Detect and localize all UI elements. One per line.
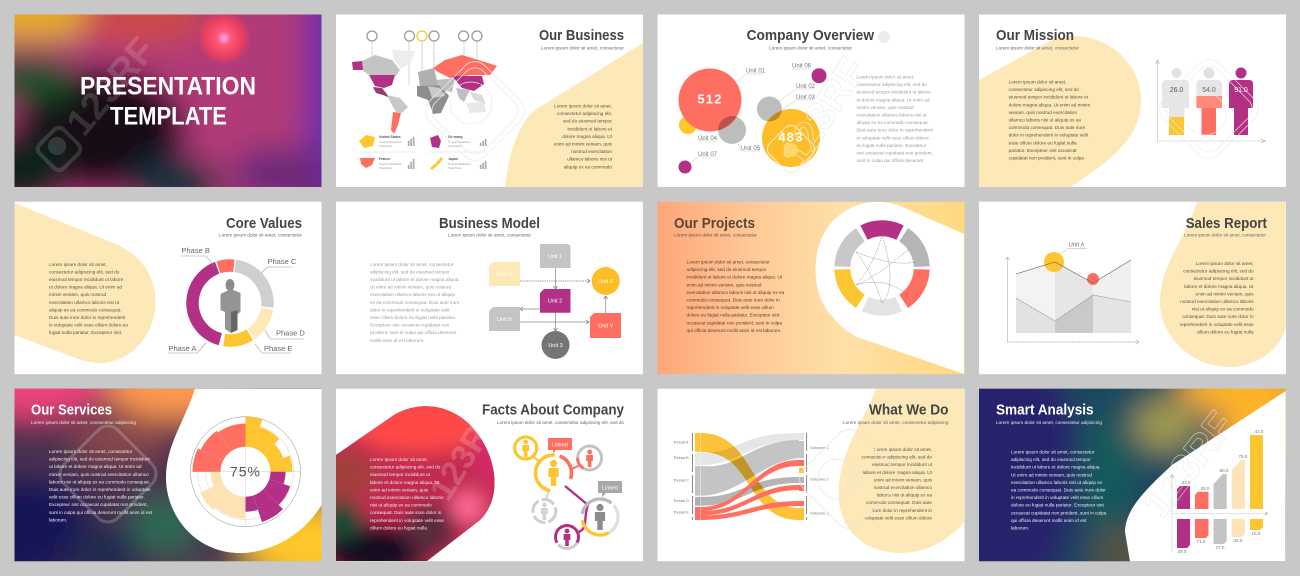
text block: Excepteur sint occaecat cupidatat non proident, [49, 502, 148, 507]
text block: proident, sunt in culpa qui officia deserunt [370, 330, 457, 335]
text block: eiusmod tempor incididunt ut labore [856, 90, 931, 95]
area chart: Unit A [1068, 242, 1085, 248]
text block: sed do eiusmod tempor [563, 119, 612, 124]
bubble chart: Unit 03 [796, 95, 816, 101]
map legend: Overall Statistics [379, 140, 402, 144]
subheading: Lorem ipsum dolor sit amet, consectetur adipiscing elit, sed do [497, 420, 625, 425]
panel: facts about company [336, 388, 643, 562]
text block: nisi ut aliquip ex ea commodo [1192, 307, 1254, 312]
bubble chart: Unit 01 [746, 68, 766, 74]
map legend: United States [379, 135, 401, 139]
map legend: Overall Statistics [448, 162, 471, 166]
text block: minim veniam, quis nostrud [49, 292, 106, 297]
bubble chart: 483 [778, 130, 804, 144]
map legend: Total Rate [379, 144, 393, 148]
text block: qui officia deserunt mollit anim id est [1011, 518, 1087, 523]
text block: laborum. [1011, 526, 1029, 530]
flow diagram: Unit 3 [548, 343, 563, 349]
text block: consectetur adipiscing elit, sed do [1183, 269, 1254, 274]
text block: labore et dolore magna aliqua. Ut [863, 470, 933, 475]
map legend: Total Rate [448, 166, 462, 170]
text block: enim ad minim veniam, quis [1195, 291, 1254, 296]
map legend: Total Rate [379, 166, 393, 170]
phase labels: Phase E [264, 344, 292, 353]
text block: Duis aute irure dolor in reprehenderit [856, 128, 934, 133]
text block: Lorem ipsum dolor sit amet, consectetur [686, 260, 770, 264]
panel: sales report [979, 202, 1286, 374]
text block: labore et dolore magna aliqua. Ut [1184, 284, 1254, 289]
text block: dolore eu fugiat nulla pariatur. Excepteur sint [686, 313, 780, 318]
text block: qui officia deserunt mollit anim id est laborum. [686, 328, 782, 333]
text block: exercitation ullamco laboris nisi ut [856, 112, 927, 118]
sankey chart: Outcome 1 [810, 446, 829, 450]
watermark stamp [794, 424, 904, 534]
map legend: Overall Statistics [379, 162, 402, 166]
text block: aliquip ex ea commodo consequat. [49, 307, 121, 312]
text block: consectetur adipiscing elit, sed do [856, 82, 927, 87]
text block: reprehenderit in voluptate velit esse cillum [686, 305, 774, 310]
text block: ut labore et dolore magna aliqua. Ut enim ad [49, 464, 142, 469]
text block: in reprehenderit in voluptate velit esse cillum [1011, 495, 1103, 500]
subheading: Lorem ipsum dolor sit amet, consectetur [1184, 233, 1267, 238]
text block: dolore magna aliqua. Ut [562, 134, 613, 139]
text block: ex ea commodo consequat. Duis aute irure [370, 300, 460, 305]
text block: minim veniam, quis nostrud [856, 105, 914, 110]
text block: Lorem ipsum dolor sit amet, [1009, 80, 1066, 84]
watermark stamp [420, 56, 530, 166]
panel: what we do [658, 389, 964, 561]
text block: nostrud exercitation ullamco laboris [370, 495, 444, 500]
text block: adipiscing elit, sed do eiusmod tempor incididunt [49, 457, 151, 462]
subheading: Lorem ipsum dolor sit amet, consectetur [996, 46, 1080, 51]
panel: title slide [14, 14, 322, 187]
text block: occaecat cupidatat non proident, sunt in culpa [1011, 510, 1107, 515]
heading: Our Business [539, 27, 624, 44]
text block: nostrud exercitation ullamco laboris [1180, 299, 1254, 304]
panel: our projects [658, 202, 964, 374]
text block: commodo consequat. Duis aute irure [1009, 125, 1086, 130]
bubble chart: 512 [697, 92, 723, 106]
text block: Lorem ipsum dolor sit amet, consectetur [49, 449, 133, 454]
text block: in voluptate velit esse cillum dolore eu [49, 323, 128, 328]
heading: presentation template [82, 76, 254, 124]
text block: nisi ut aliquip ex ea commodo [370, 503, 432, 508]
text block: consequat. Duis aute irure dolor in [1182, 314, 1254, 319]
text block: Ut enim ad minim veniam, quis nostrud [370, 285, 451, 290]
text block: et dolore magna aliqua. Ut enim ad [856, 97, 930, 102]
text block: consectetur adipiscing elit, [557, 111, 612, 116]
text block: ullamco laboris nisi ut aliquip ex ea [1009, 118, 1081, 122]
gradient pill [336, 406, 494, 561]
panel: our business [336, 14, 643, 187]
text block: laboris nisi ut aliquip ex ea commodo consequat. [49, 479, 150, 484]
radial chart [190, 417, 301, 527]
text block: irure dolor in reprehenderit in [872, 508, 932, 513]
text block: incididunt ut labore et [567, 126, 613, 131]
text block: commodo consequat. Duis aute [866, 500, 932, 505]
text block: cillum dolore eu fugiat nulla [1197, 329, 1254, 334]
subheading: Lorem ipsum dolor sit amet, consectetur [448, 233, 532, 238]
watermark: 123RF [1134, 404, 1243, 526]
text block: nostrud exercitation [571, 149, 612, 154]
text block: pariatur. Excepteur sint occaecat [1009, 148, 1077, 153]
people values: 91.0 [1234, 87, 1248, 94]
area chart [1006, 242, 1139, 344]
network diagram [515, 437, 625, 553]
text block: commodo consequat. Duis aute irure dolor in [686, 298, 780, 302]
text block: Lorem ipsum dolor sit amet, consectetur [370, 262, 454, 267]
heading: presentation template: TEMPLATE [110, 102, 227, 130]
people chart [1156, 60, 1266, 143]
text block: eiusmod tempor incididunt ut [1194, 276, 1254, 281]
map legend: Overall Statistics [448, 140, 471, 144]
panel: smart analysis [979, 388, 1286, 562]
diverging bar chart: 33.0 [1182, 480, 1191, 485]
heading: Our Mission [996, 27, 1074, 44]
callout: linked gray [598, 481, 622, 497]
radial chart: 75% [230, 464, 261, 480]
sankey chart: Thread A [673, 440, 689, 444]
text block: enim ad minim veniam, quis [874, 477, 933, 482]
bubble chart: Unit 06 [792, 64, 812, 70]
icon: person [220, 279, 240, 333]
diverging bar chart: 50.0 [1220, 468, 1229, 473]
diverging bar chart: 27.0 [1216, 545, 1225, 550]
text block: aliquip ex ea commodo consequat. [856, 120, 929, 125]
people values [1170, 87, 1248, 94]
text block: minim veniam, quis nostrud exercitation ullamco [49, 472, 149, 477]
map legend: Germany [448, 135, 463, 139]
text block: laboris nisi ut aliquip ex ea [877, 493, 932, 498]
text block: dolore magna aliqua. Ut enim ad minim [1009, 102, 1090, 107]
diverging bar chart [1170, 429, 1268, 554]
panel: company overview [658, 14, 964, 187]
text block: cillum dolore eu fugiat nulla. [370, 525, 428, 530]
flow diagram: Unit A [497, 272, 512, 278]
phase labels: Phase C [268, 257, 297, 266]
watermark stamp [58, 424, 158, 524]
heading: Core Values [226, 215, 302, 232]
text block: Duis aute irure dolor in reprehenderit in voluptate [49, 487, 151, 492]
flow diagram: Unit Y [598, 324, 613, 330]
text block: eiusmod tempor incididunt ut labore [49, 277, 124, 282]
watermark [36, 35, 148, 172]
map legend [358, 135, 486, 170]
text block: Lorem ipsum dolor sit amet, [370, 457, 428, 462]
text block: occaecat cupidatat non proident, sunt in culpa [686, 320, 782, 325]
sankey chart: Thread B [673, 456, 689, 460]
text block: exercitation ullamco laboris nisi ut aliquip [370, 292, 455, 297]
text block: velit esse cillum dolore eu fugiat nulla pariatur. [49, 495, 145, 500]
heading: Smart Analysis [996, 402, 1094, 418]
subheading: Lorem ipsum dolor sit amet, consectetur adipiscing [843, 420, 949, 425]
text block: incididunt ut labore et dolore magna aliqua. [370, 277, 460, 282]
text block: esse cillum dolore eu fugiat nulla [1009, 140, 1077, 145]
text block: nostrud exercitation ullamco [874, 485, 932, 490]
text block: aliquip ex ea commodo [564, 164, 612, 169]
sankey chart: Thread D [673, 499, 689, 503]
sankey chart [673, 433, 829, 520]
watermark: 123RF [423, 401, 509, 507]
diverging bar chart: 15.0 [1252, 531, 1261, 536]
heading: Our Services [31, 402, 112, 418]
heading: Business Model [439, 215, 540, 232]
text block: enim ad minim veniam, quis [370, 487, 429, 492]
text block: esse cillum dolore eu fugiat nulla pariatur. [370, 315, 456, 320]
text block: consectetur adipiscing elit, sed do [862, 455, 932, 460]
sankey chart: Thread C [673, 478, 689, 482]
text block: voluptate velit esse cillum dolore [865, 515, 932, 520]
text block: eu fugiat nulla pariatur. Excepteur [856, 143, 927, 148]
flow diagram: Unit B [497, 317, 512, 323]
text block: Excepteur sint occaecat cupidatat non [370, 323, 450, 328]
panel: core values [14, 202, 322, 374]
text block: Lorem ipsum dolor sit amet, [1196, 261, 1254, 266]
text block: in voluptate velit esse cillum dolore [856, 135, 929, 140]
people values: 26.0 [1170, 87, 1183, 94]
flow diagram: Unit X [598, 279, 614, 285]
text block: Lorem ipsum dolor sit amet, [554, 104, 612, 108]
text block: sunt in culpa qui officia deserunt mollit anim id est [49, 510, 153, 515]
heading: Company Overview [747, 27, 874, 44]
subheading: Lorem ipsum dolor sit amet, consectetur [219, 233, 303, 238]
donut chart [178, 251, 282, 355]
heading: What We Do [869, 402, 948, 418]
text block: dolore eu fugiat nulla pariatur. Excepteur sint [1011, 503, 1104, 508]
text block: consectetur adipiscing elit, sed do [1009, 87, 1079, 92]
diverging bar chart: 39.0 [1178, 549, 1187, 554]
text block: consectetur adipiscing elit, sed do [370, 465, 441, 470]
diverging bar chart: 71.0 [1197, 539, 1206, 544]
text block: laborum. [49, 517, 67, 522]
text block: eiusmod tempor incididunt ut labore et [1009, 95, 1089, 100]
flow diagram: Unit 1 [548, 254, 562, 260]
text block: exercitation ullamco laboris nisi ut aliquip ex ea [686, 290, 785, 295]
text block: Duis aute irure dolor in reprehenderit [49, 315, 126, 320]
text block: veniam, quis nostrud exercitation [1009, 110, 1078, 115]
text block: Lorem ipsum dolor sit amet, [856, 74, 914, 80]
text block: Lorem ipsum dolor sit amet, [874, 447, 932, 452]
text block: enim ad minim veniam, quis nostrud [686, 282, 762, 287]
sankey chart: Outcome 2 [810, 478, 829, 482]
phase labels: Phase D [276, 328, 305, 338]
icons: people [522, 440, 605, 546]
phase labels: Phase A [168, 344, 196, 353]
text block: ea commodo consequat. Duis aute irure dolor [1011, 488, 1106, 492]
flow diagram: Unit 2 [548, 298, 562, 304]
text block: incididunt ut labore et dolore magna aliqua. [1011, 465, 1101, 470]
text block: Lorem ipsum dolor sit amet, consectetur [1011, 450, 1095, 454]
text block: et dolore magna aliqua. Ut enim ad [49, 285, 122, 290]
watermark [764, 31, 890, 176]
callout: linked coral [548, 438, 572, 453]
text block: ullamco laboris nisi ut [567, 157, 613, 162]
watermark stamp [1154, 54, 1264, 164]
text block: reprehenderit in voluptate velit esse [1180, 322, 1254, 327]
text block: incididunt ut labore et dolore magna aliqua. Ut [686, 275, 783, 280]
ring chord diagram [834, 220, 930, 316]
people values: 54.0 [1202, 87, 1216, 94]
text block: adipiscing elit, sed do eiusmod tempor [1011, 457, 1091, 462]
bubble chart: Unit 02 [796, 84, 816, 90]
text block: dolor in reprehenderit in voluptate velit [1009, 133, 1089, 138]
text block: eiusmod tempor incididunt ut [872, 462, 933, 467]
world map [352, 31, 497, 134]
subheading: Lorem ipsum dolor sit amet, consectetur adipiscing [31, 420, 137, 425]
text block: exercitation ullamco laboris nisi ut [49, 300, 120, 305]
text block: enim ad minim veniam, quis [554, 142, 613, 146]
diverging bar chart: 42.0 [1255, 429, 1264, 434]
heading: Our Projects [674, 215, 755, 232]
text block: fugiat nulla pariatur. Excepteur sint. [49, 330, 122, 335]
subheading: Lorem ipsum dolor sit amet, consectetur [674, 233, 758, 238]
callout: linked coral: Linked [552, 442, 568, 448]
text block: adipiscing elit, sed do eiusmod tempor [686, 267, 767, 272]
heading: Facts About Company [482, 402, 625, 418]
heading: Sales Report [1186, 215, 1267, 232]
watermark: 123RF [59, 29, 164, 144]
subheading: Lorem ipsum dolor sit amet, consectetur [541, 46, 625, 51]
panel: our services [14, 388, 322, 562]
bubble chart: Unit 05 [741, 146, 761, 152]
text block: reprehenderit in voluptate velit esse [370, 518, 444, 523]
heading: presentation template: PRESENTATION [80, 72, 256, 100]
text block: Ut enim ad minim veniam, quis nostrud [1011, 472, 1092, 477]
bubble chart: Unit 07 [698, 152, 718, 158]
text block: consectetur adipiscing elit, sed do [49, 269, 120, 274]
bubble chart [678, 64, 826, 174]
text block: dolor in reprehenderit in voluptate velit [370, 307, 450, 312]
diverging bar chart: 25.0 [1201, 486, 1210, 491]
phase labels: Phase B [182, 246, 210, 255]
watermark: 123RF [773, 50, 875, 175]
text block: labore et dolore magna aliqua. Ut [370, 480, 440, 485]
text block: adipiscing elit, sed do eiusmod tempor [370, 269, 450, 274]
callout: linked gray: Linked [602, 486, 618, 492]
phase labels [168, 246, 305, 353]
text block: Lorem ipsum dolor sit amet, [49, 262, 107, 267]
text block: sint occaecat cupidatat non proident, [856, 150, 933, 156]
diverging bar chart: 75.0 [1239, 454, 1248, 459]
text block: exercitation ullamco laboris nisi ut aliquip ex [1011, 480, 1103, 485]
map legend: France [379, 157, 390, 161]
text block: mollit anim id est laborum. [370, 338, 424, 343]
map legend: Total Rate [448, 144, 462, 148]
text block: eiusmod tempor incididunt ut [370, 472, 431, 477]
subheading: Lorem ipsum dolor sit amet, consectetur adipiscing [996, 420, 1103, 425]
subheading: Lorem ipsum dolor sit amet, consectetur [769, 46, 853, 51]
bubble chart: Unit 04 [698, 136, 718, 142]
sankey chart: Outcome 3 [810, 512, 829, 516]
sankey chart: Thread E [673, 510, 689, 514]
text block: sunt in culpa qui officia deserunt [856, 158, 924, 163]
text block: consequat. Duis aute irure dolor in [370, 510, 442, 515]
flow diagram [489, 244, 621, 359]
map legend: Japan [448, 157, 458, 161]
panel: business model [336, 202, 643, 374]
diverging bar chart: 34.0 [1234, 538, 1243, 543]
text block: cupidatat non proident, sunt in culpa [1009, 156, 1084, 160]
panel: our mission [979, 14, 1286, 187]
